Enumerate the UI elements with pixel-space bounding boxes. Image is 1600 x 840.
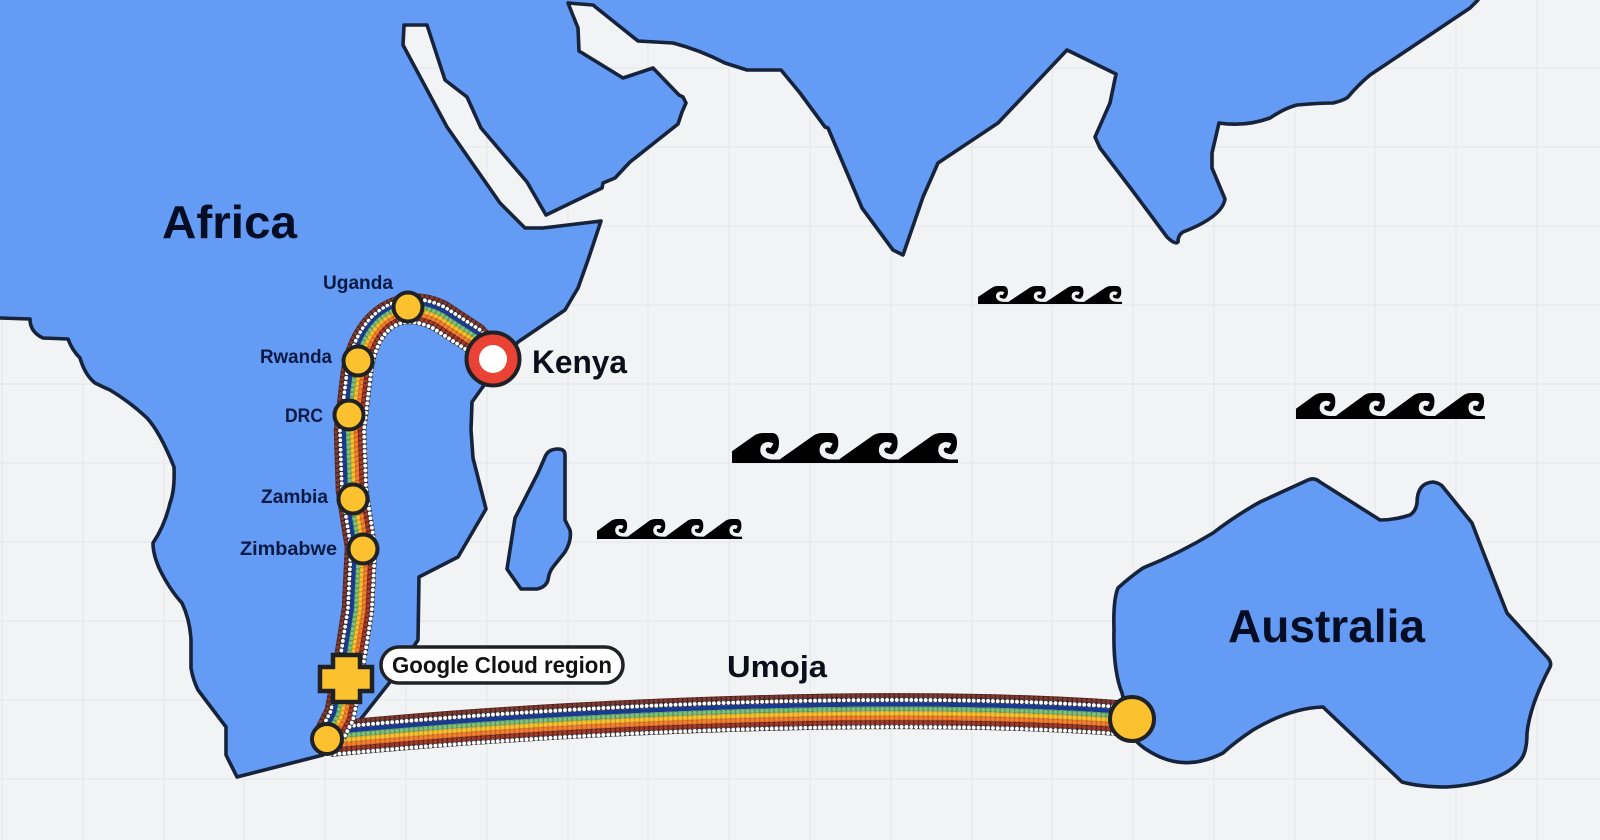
label: Zimbabwe: Zimbabwe [240,539,337,560]
icon: small wave, near Madagascar [590,519,745,539]
label: Uganda: Uganda [323,273,393,294]
marker: Uganda [394,292,422,322]
landmass: Madagascar [507,449,570,589]
Umoja cable: overland section [316,296,501,745]
Umoja cable: ocean section [330,695,1130,755]
icon: large wave, centre [721,433,962,463]
marker: Kenya origin [466,332,520,386]
marker: Zambia [338,484,368,514]
label: Google Cloud region: Google Cloud region [392,652,612,678]
marker: DRC [334,400,364,430]
label: Zambia: Zambia [261,487,328,508]
label: Rwanda: Rwanda [260,347,332,368]
label: Google Cloud region [381,647,623,683]
marker: South Africa landing [312,724,342,754]
label: Umoja: Umoja [727,649,828,684]
label: DRC: DRC [285,406,323,427]
icon: small wave, upper centre [971,286,1125,304]
icon: Google Cloud region cross [320,655,372,702]
label: Australia: Australia [1228,600,1425,652]
icon: medium wave, right [1287,393,1488,419]
label: Kenya: Kenya [532,344,627,380]
marker: Australia landing [1110,697,1154,741]
marker: Zimbabwe [348,534,378,564]
marker: Rwanda [344,346,372,376]
landmass: Australia [1114,479,1551,787]
label: Africa: Africa [162,196,297,248]
